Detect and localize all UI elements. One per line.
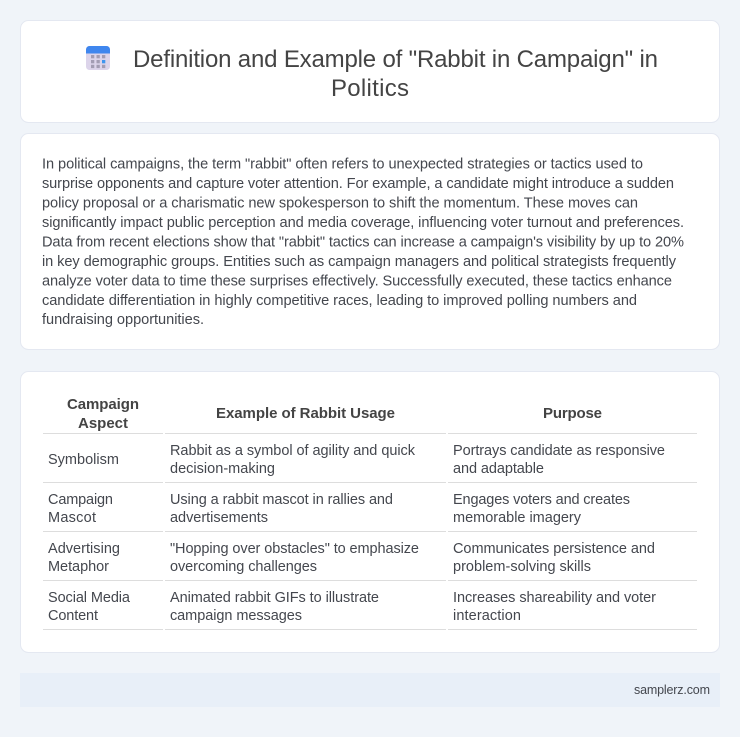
- table row: advertising metaphor: Communicates persistence and: [453, 541, 655, 557]
- footer: samplerz.com: [634, 683, 710, 697]
- table row: campaign mascot: Campaign: [48, 492, 113, 508]
- table header: Aspect: [78, 415, 128, 432]
- footer: [20, 673, 720, 707]
- text block: description: analyze voter data to time these surprises effectively. Successfully executed, these tactics enhance: [42, 273, 672, 289]
- text block: description: Data from recent elections show that "rabbit" tactics can increase a campaign's visibility by up to 20%: [42, 235, 684, 251]
- text block: description: In political campaigns, the term "rabbit" often refers to unexpected strategies or tactics used to: [42, 156, 643, 172]
- table row: symbolism: Symbolism: [48, 452, 119, 468]
- table row: symbolism: [48, 443, 665, 477]
- panel: table card: [20, 372, 720, 652]
- panel: description card: [20, 134, 720, 350]
- panel: title card: [20, 20, 720, 122]
- table row: social media content: Animated rabbit GIFs to illustrate: [170, 590, 379, 606]
- title: [133, 46, 658, 102]
- table row: advertising metaphor: overcoming challenges: [170, 559, 317, 575]
- table row: social media content: campaign messages: [170, 608, 302, 624]
- text block: description: significantly impact public perception and media coverage, influencing voter turnout and preferences.: [42, 215, 684, 231]
- table row: social media content: Social Media: [48, 590, 131, 606]
- table row: campaign mascot: Mascot: [48, 510, 96, 526]
- table row: campaign mascot: memorable imagery: [453, 510, 582, 526]
- table row: social media content: [48, 590, 656, 624]
- text block: description: surprise opponents and capture voter attention. For example, a candidate might introduce a sudden: [42, 176, 674, 192]
- table row: campaign mascot: Using a rabbit mascot in rallies and: [170, 492, 393, 508]
- table row: advertising metaphor: [48, 541, 655, 575]
- table header: Example of Rabbit Usage: [216, 405, 395, 422]
- table row: social media content: interaction: [453, 608, 521, 624]
- table row: symbolism: decision-making: [170, 461, 275, 477]
- table row: advertising metaphor: problem-solving skills: [453, 559, 591, 575]
- table row: advertising metaphor: Metaphor: [48, 559, 109, 575]
- table row: social media content: Increases shareability and voter: [453, 590, 656, 606]
- table row: campaign mascot: [48, 492, 630, 526]
- icon: calendar: [86, 46, 110, 70]
- table row: symbolism: Rabbit as a symbol of agility and quick: [170, 443, 416, 459]
- text block: description: fundraising opportunities.: [42, 312, 204, 328]
- title: Politics: [331, 75, 409, 102]
- table header: Campaign: [67, 396, 139, 413]
- text block: description: in key demographic groups. Entities such as campaign managers and political strategists frequently: [42, 254, 677, 270]
- table header: Purpose: [543, 405, 602, 422]
- text block: description: candidate differentiation in highly competitive races, leading to improved polling numbers and: [42, 293, 637, 309]
- table row: campaign mascot: advertisements: [170, 510, 268, 526]
- table header: [67, 396, 602, 432]
- table row: symbolism: and adaptable: [453, 461, 544, 477]
- text block: description: [42, 156, 684, 328]
- title: Definition and Example of "Rabbit in Campaign" in: [133, 46, 658, 73]
- table row: advertising metaphor: "Hopping over obstacles" to emphasize: [170, 541, 419, 557]
- table row: campaign mascot: Engages voters and creates: [453, 492, 630, 508]
- table row: symbolism: Portrays candidate as responsive: [453, 443, 665, 459]
- table row: social media content: Content: [48, 608, 98, 624]
- table row: advertising metaphor: Advertising: [48, 541, 120, 557]
- text block: description: policy proposal or a charismatic new spokesperson to shift the momentum. These moves can: [42, 195, 638, 211]
